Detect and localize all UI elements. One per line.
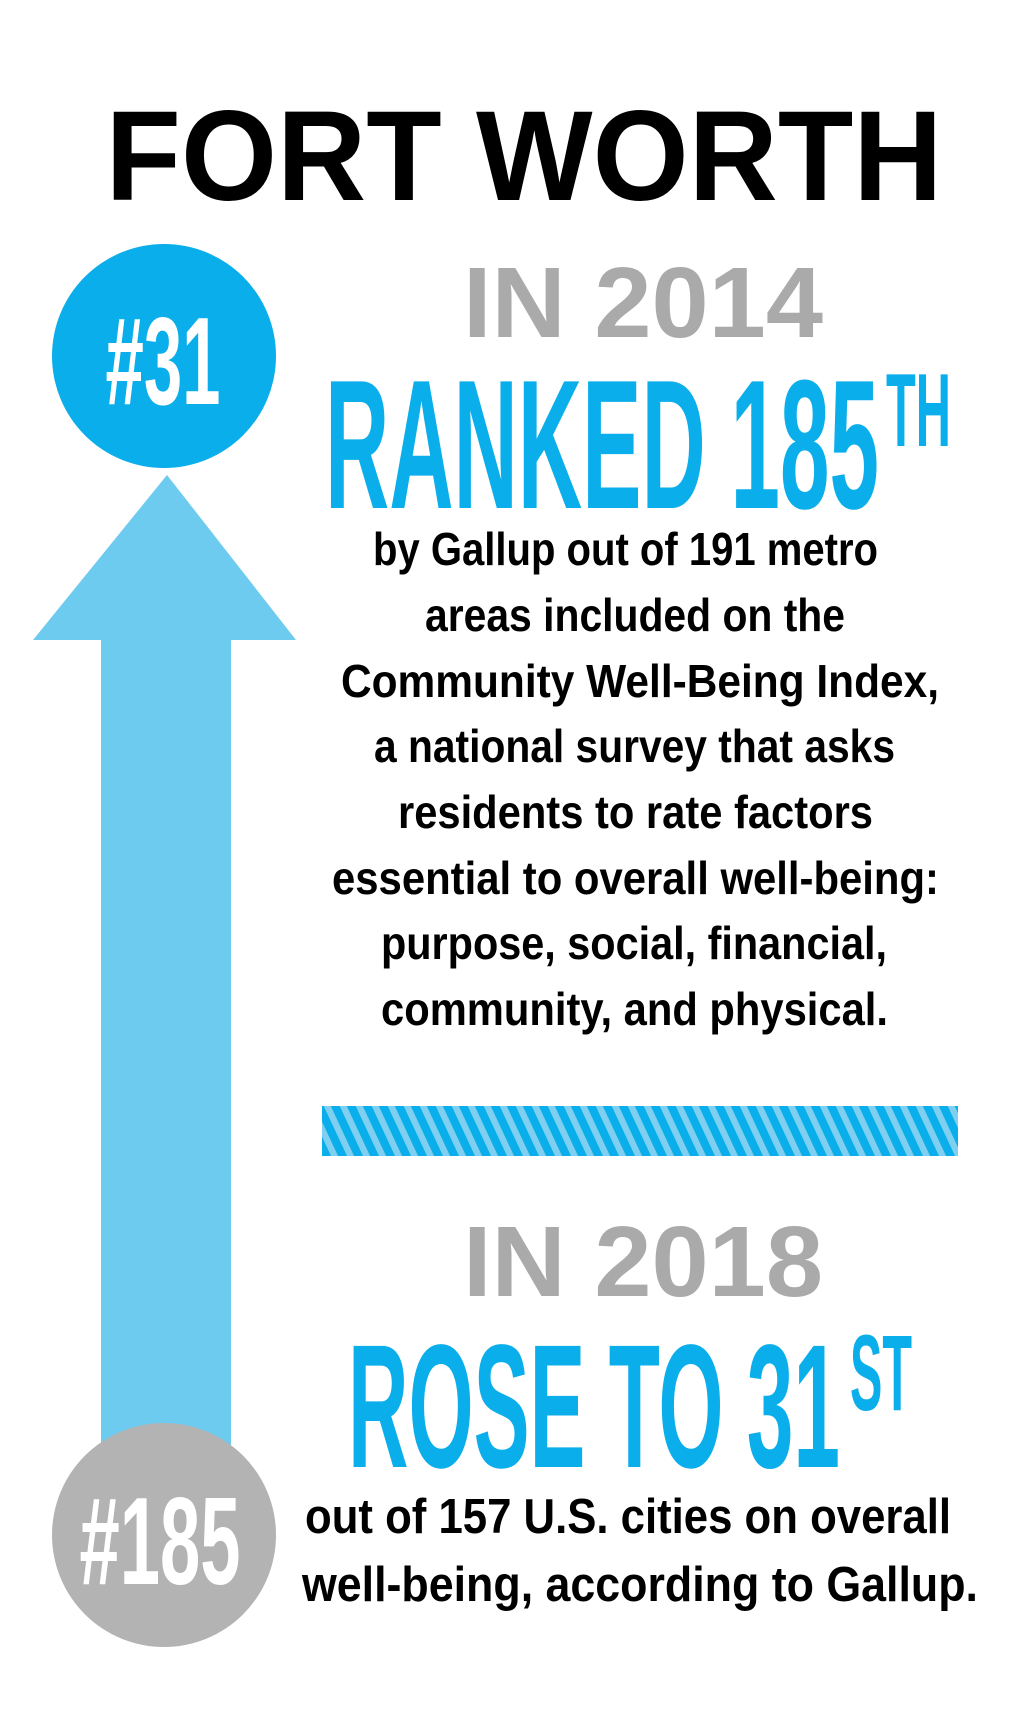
text block: 2014 description: by Gallup out of 191 metro: [373, 523, 878, 575]
text block: 2014 description: residents to rate factors: [398, 786, 873, 838]
title: FORT WORTH: [106, 85, 942, 228]
text block: 2014 description: purpose, social, financial,: [381, 917, 887, 969]
text block: 2014 description: community, and physical.: [381, 983, 888, 1035]
text block: 2014 description: essential to overall well-being:: [332, 852, 939, 904]
text: ST: [850, 1312, 912, 1433]
circle: #31: [52, 244, 276, 468]
text block: 2014 description: Community Well-Being Index,: [341, 655, 939, 707]
circle: #31: #31: [106, 293, 220, 431]
heading: in 2014: IN 2014: [463, 247, 823, 359]
text block: 2014 description: a national survey that asks: [374, 720, 895, 772]
circle: #185: #185: [80, 1473, 240, 1611]
text block: 2014 description: areas included on the: [425, 589, 845, 641]
text block: 2018 description: out of 157 U.S. cities on overall: [305, 1490, 951, 1544]
text: TH: [886, 353, 951, 469]
text block: 2018 description: [301, 1490, 978, 1612]
text block: 2018 description: well-being, according to Gallup.: [301, 1558, 978, 1612]
circle: #185: [52, 1423, 276, 1647]
text block: 2014 description: [332, 523, 939, 1035]
arrow: [33, 475, 296, 1459]
striped divider: [322, 1106, 958, 1156]
heading: in 2018: IN 2018: [463, 1206, 823, 1318]
